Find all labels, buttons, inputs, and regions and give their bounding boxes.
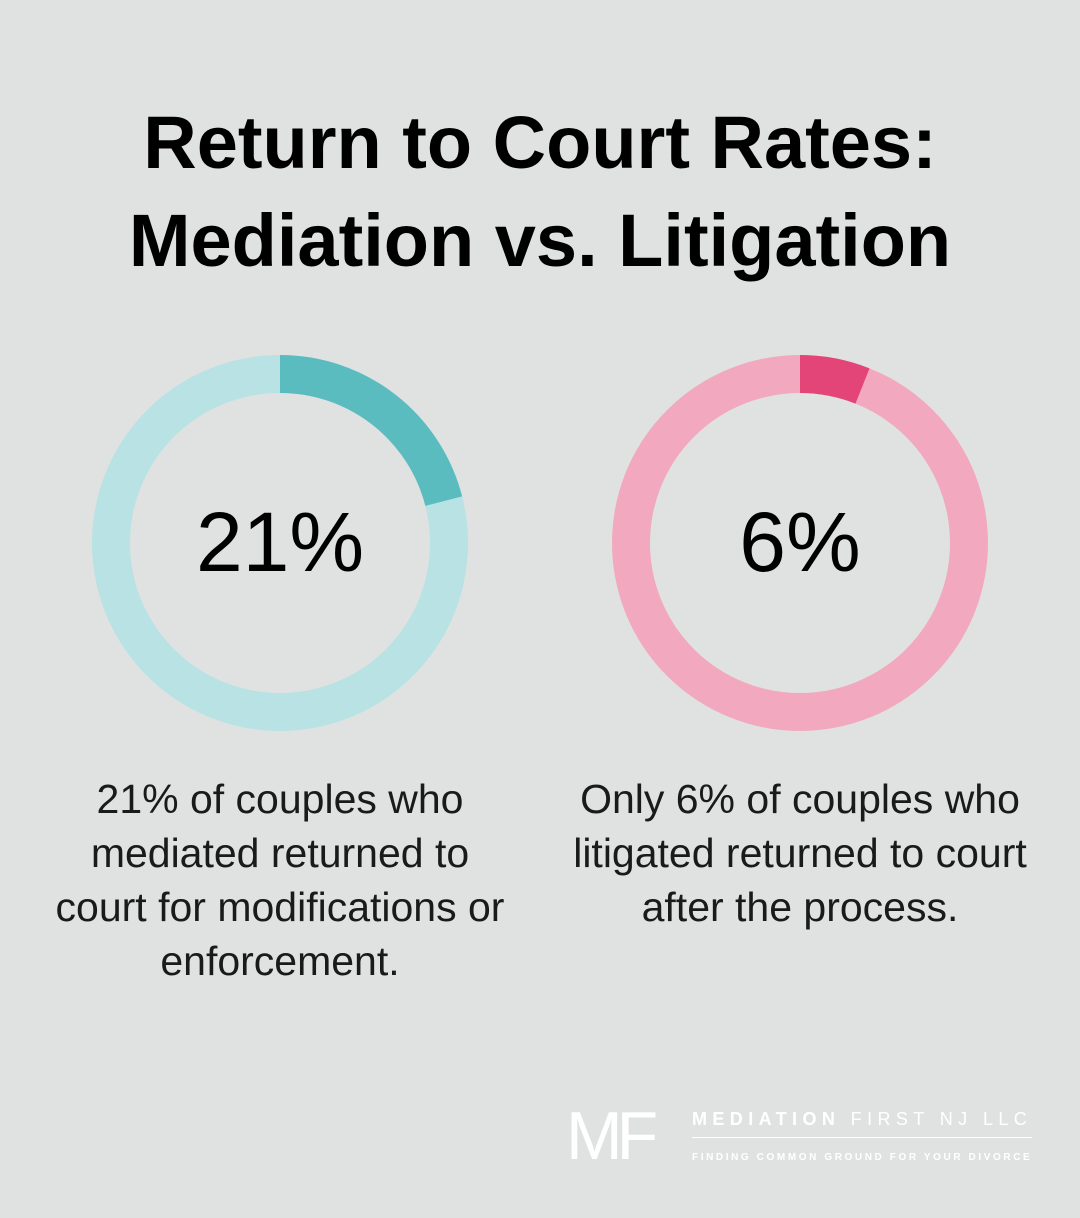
donut: mediation 21% <box>92 355 468 731</box>
text: mediation description: mediated returned to <box>91 830 469 876</box>
donut: litigation 6% <box>612 355 988 731</box>
text: mediation description: court for modifications or <box>56 884 504 930</box>
text: litigation description: Only 6% of couples who <box>580 776 1020 822</box>
logo: MEDIATION FIRST NJ LLC <box>692 1109 1032 1129</box>
text: mediation description: 21% of couples who <box>97 776 463 822</box>
logo: FINDING COMMON GROUND FOR YOUR DIVORCE <box>692 1152 1032 1163</box>
text: mediation description: enforcement. <box>160 938 400 984</box>
donut: mediation 21%: 21% <box>196 495 364 589</box>
title <box>129 101 951 282</box>
logo <box>566 1098 1032 1174</box>
text: mediation description <box>56 776 504 984</box>
title: Return to Court Rates: <box>143 101 937 184</box>
logo: MF <box>566 1098 652 1174</box>
text: litigation description: after the process. <box>642 884 958 930</box>
donut: litigation 6%: 6% <box>739 495 861 589</box>
text: litigation description: litigated returned to court <box>573 830 1027 876</box>
title: Mediation vs. Litigation <box>129 199 951 282</box>
text: litigation description <box>573 776 1027 930</box>
